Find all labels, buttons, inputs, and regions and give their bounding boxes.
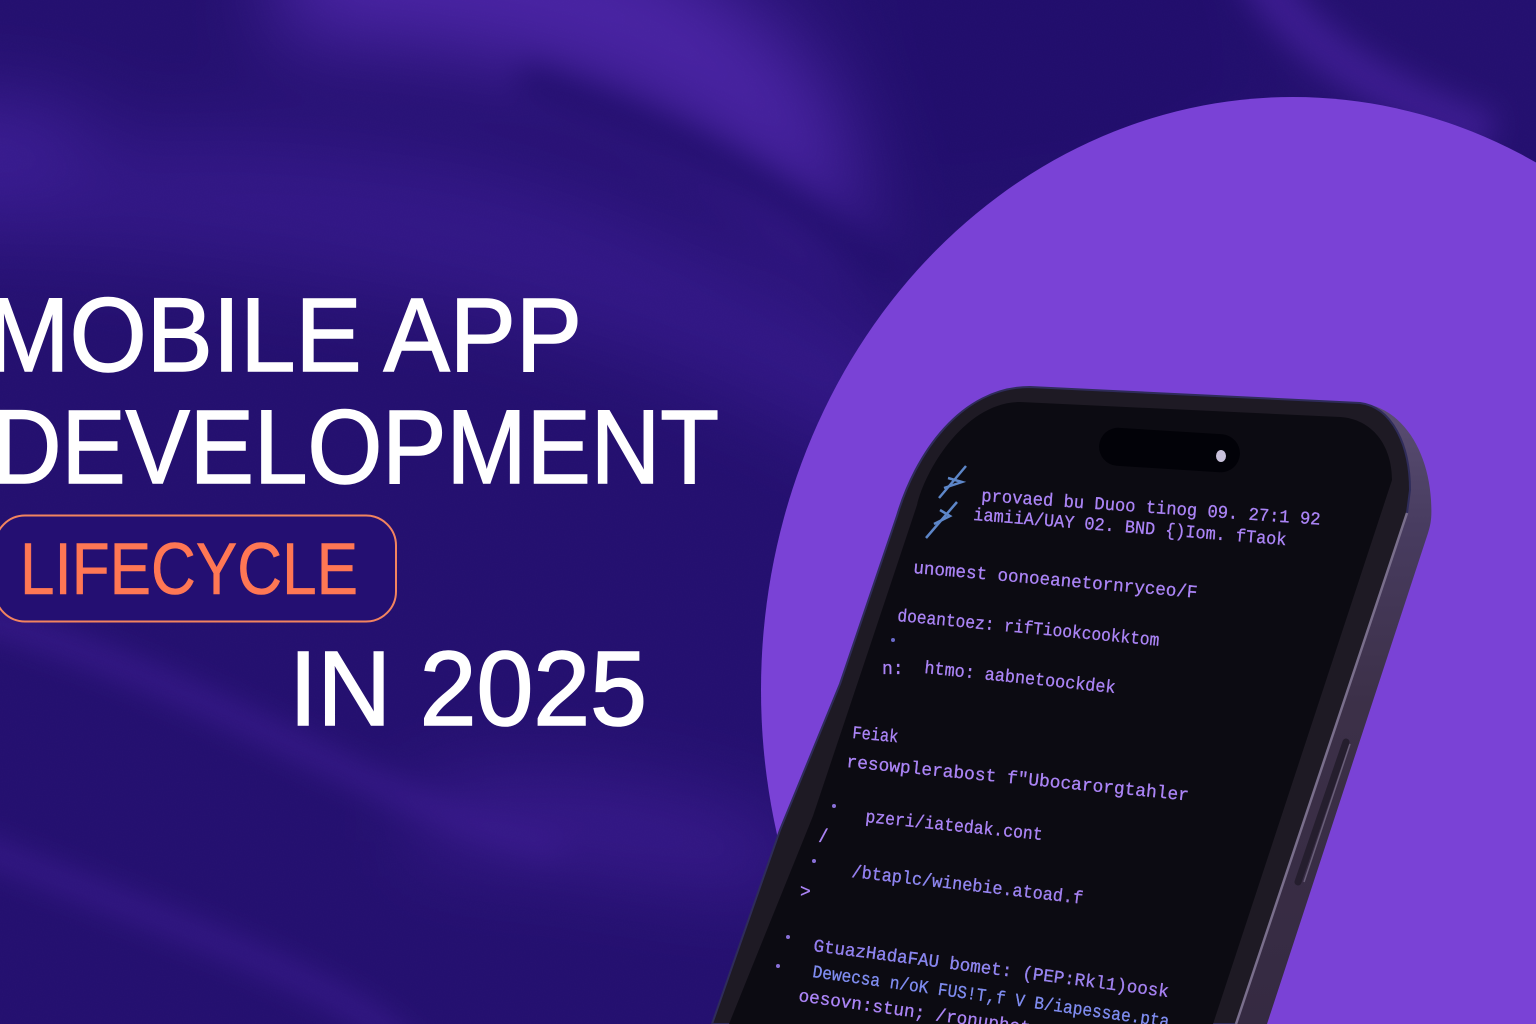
lifecycle pill (0, 516, 396, 622)
phone (712, 387, 1431, 1024)
screen code text: Feiak (851, 724, 899, 748)
side metal highlight (1236, 513, 1407, 1024)
title line: MOBILE APP: MOBILE APP (0, 277, 582, 394)
camera island (1098, 427, 1241, 473)
title line: DEVELOPMENT: DEVELOPMENT (0, 389, 719, 506)
screen code text: GtuazHadaFAU bomet: (PEP:Rkl1)oosk (812, 937, 1170, 1003)
lifecycle label: LIFECYCLE (20, 529, 358, 610)
screen code text: provaed bu Duoo tinog 09. 27:1 92 (981, 487, 1321, 531)
screen code text: resowplerabost f"Ubocarorgtahler (845, 753, 1190, 807)
code header icon (926, 466, 966, 538)
phone front rim (712, 387, 1410, 1024)
screen code text: pzeri/iatedak.cont (864, 808, 1044, 846)
screen code text: doeantoez: rifTiookcookktom (896, 607, 1160, 652)
screen code text: > (800, 883, 811, 903)
screen code text: n: (882, 660, 904, 680)
title line: IN 2025: IN 2025 (289, 630, 647, 748)
screen code text: htmo: aabnetoockdek (923, 659, 1116, 699)
side button (1298, 742, 1350, 882)
screen code text: unomest oonoeanetornryceo/F (912, 559, 1198, 604)
screen code text (776, 466, 1321, 1024)
purple circle backdrop (761, 97, 1536, 1024)
phone body with metal side (712, 387, 1431, 1024)
screen code text: /btaplc/winebie.atoad.f (850, 863, 1084, 910)
phone screen (729, 402, 1392, 1024)
camera lens (1216, 450, 1226, 462)
screen code text: iamiiA/UAY 02. BND {)Iom. fTaok (973, 506, 1287, 551)
screen code text: / (818, 828, 829, 848)
